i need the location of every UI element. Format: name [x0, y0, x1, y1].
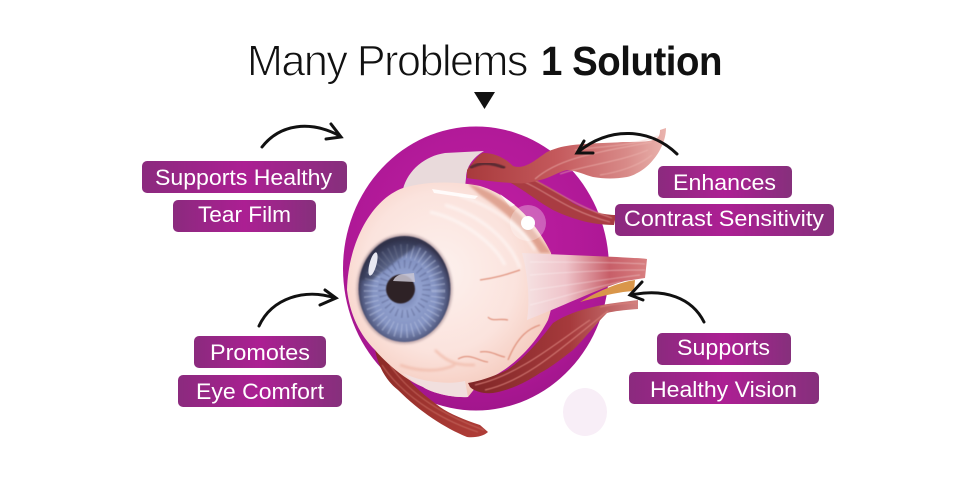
title — [247, 36, 722, 86]
arrow: bottom right — [630, 282, 704, 322]
decorative pale blob — [563, 388, 607, 436]
label: Promotes Eye Comfort — [178, 336, 342, 407]
orange fat strip — [580, 280, 635, 302]
tendon and muscle: lateral right — [522, 253, 647, 320]
purple disc — [343, 126, 609, 410]
label: Enhances Contrast Sensitivity — [615, 166, 834, 236]
label: Promotes Eye Comfort: Promotes — [210, 340, 310, 365]
small highlight dot — [510, 205, 546, 241]
label: Supports Healthy Tear Film: Supports Healthy — [155, 165, 332, 190]
sheen stripes — [430, 196, 535, 268]
tendon: top white — [403, 151, 484, 196]
label: Enhances Contrast Sensitivity: Enhances — [673, 170, 776, 195]
arrow: top right — [577, 133, 677, 154]
label: Supports Healthy Vision: Supports — [677, 335, 770, 360]
highlight — [367, 252, 379, 276]
illustration: eye on purple disc — [343, 126, 666, 437]
label: Promotes Eye Comfort: Eye Comfort — [196, 379, 324, 404]
muscle: top twisted — [467, 128, 666, 183]
title: Many Problems — [247, 36, 527, 86]
bottom tendon — [403, 373, 468, 397]
label: Enhances Contrast Sensitivity: Contrast Sensitivity — [624, 206, 824, 231]
label: Supports Healthy Tear Film: Tear Film — [198, 202, 291, 227]
muscle: bottom inferior oblique — [375, 350, 488, 437]
pupil — [386, 274, 415, 304]
muscle: band behind to contrast label — [505, 168, 616, 225]
muscle: lower right — [468, 300, 638, 393]
iris — [356, 234, 452, 344]
arrow: bottom left — [259, 290, 336, 326]
title: 1 Solution — [541, 38, 722, 84]
label: Supports Healthy Vision — [629, 333, 819, 404]
label: Supports Healthy Tear Film — [142, 161, 347, 232]
arrow: top left — [262, 124, 341, 147]
arrow: down triangle under title — [474, 92, 495, 109]
eyeball — [347, 182, 554, 397]
veins — [458, 270, 540, 362]
label: Supports Healthy Vision: Healthy Vision — [650, 377, 797, 402]
